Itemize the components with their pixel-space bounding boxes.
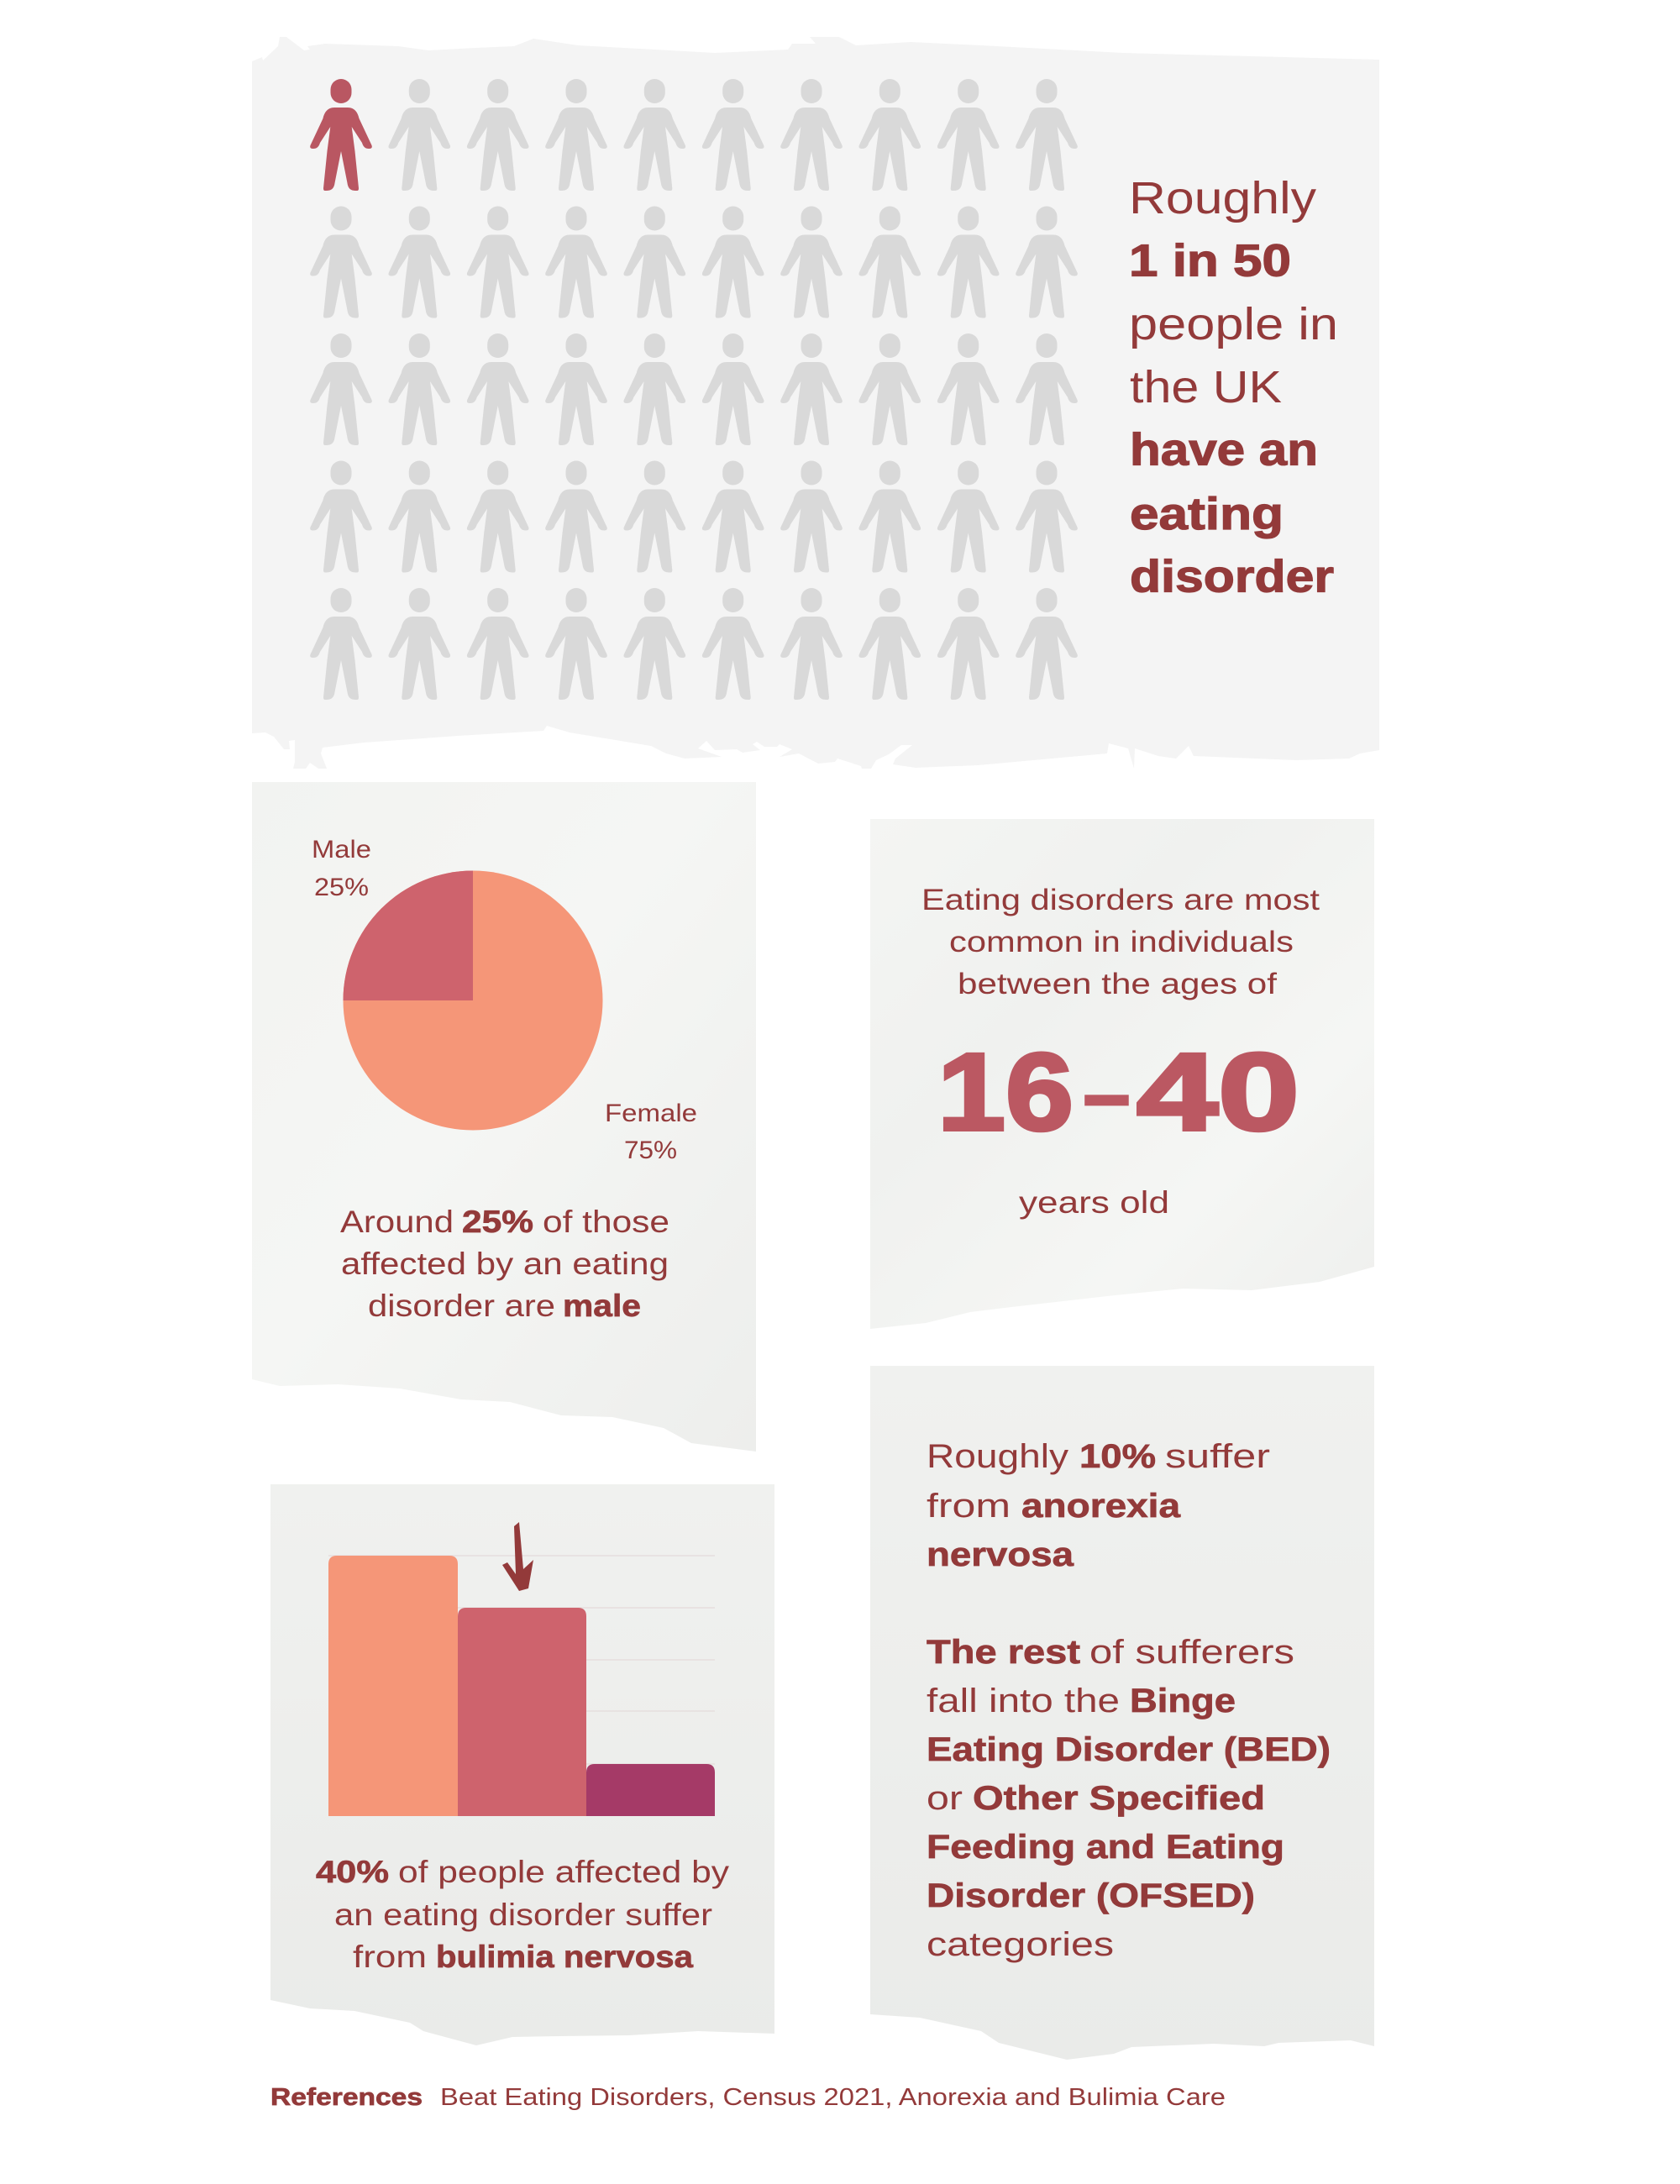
text: anorexia statement: suffer bbox=[1165, 1438, 1270, 1475]
text: 1 in 50 statement: disorder bbox=[1130, 551, 1334, 601]
arrow bbox=[502, 1522, 533, 1591]
text: other categories statement: The rest bbox=[927, 1634, 1080, 1671]
label: female 75%: 75% bbox=[624, 1137, 677, 1164]
text: 40 percent bulimia: bulimia nervosa bbox=[436, 1940, 693, 1974]
torn paper background bbox=[252, 782, 756, 1452]
text: 1 in 50 statement: eating bbox=[1130, 489, 1284, 539]
text: 25 percent are male: 25% bbox=[462, 1205, 533, 1239]
bar: first bbox=[328, 1556, 458, 1816]
label: male 25%: 25% bbox=[314, 874, 369, 901]
text: 40 percent bulimia: of people affected by bbox=[398, 1855, 730, 1889]
text: other categories statement: fall into the bbox=[927, 1683, 1120, 1719]
panel: other eating disorders bbox=[870, 1366, 1374, 2060]
text: 25 percent are male: Around bbox=[340, 1205, 454, 1239]
text: 1 in 50 statement: Roughly bbox=[1129, 173, 1316, 223]
big number: 16-40: 40 bbox=[1137, 1030, 1299, 1153]
text: other categories statement: or bbox=[927, 1780, 963, 1817]
text: 1 in 50 statement bbox=[1129, 173, 1338, 601]
panel: 1 in 50 people bbox=[252, 37, 1379, 769]
text: 40 percent bulimia bbox=[316, 1855, 730, 1974]
references: Beat Eating Disorders, Census 2021, Anorexia and Bulimia Care bbox=[440, 2084, 1226, 2111]
text: age intro: between the ages of bbox=[958, 968, 1277, 1000]
bar: bulimia 40 percent bbox=[458, 1608, 586, 1816]
big number: 16-40 bbox=[937, 1030, 1299, 1153]
text: 25 percent are male bbox=[340, 1205, 669, 1323]
text: anorexia statement: Roughly bbox=[927, 1438, 1068, 1475]
pictogram: highlighted person bbox=[310, 79, 372, 191]
big number: 16-40: 16 bbox=[937, 1030, 1074, 1153]
text: other categories statement: Binge bbox=[1130, 1683, 1236, 1719]
text: other categories statement: Feeding and Eating bbox=[927, 1829, 1284, 1866]
text: 1 in 50 statement: people in bbox=[1129, 299, 1338, 349]
text: other categories statement bbox=[927, 1634, 1331, 1963]
text: anorexia statement: anorexia bbox=[1021, 1488, 1181, 1525]
text: 40 percent bulimia: an eating disorder suffer bbox=[334, 1898, 712, 1932]
text: anorexia statement: from bbox=[927, 1488, 1011, 1525]
text: anorexia statement: nervosa bbox=[927, 1536, 1074, 1573]
panel: age range bbox=[870, 819, 1374, 1329]
pie chart bbox=[343, 870, 603, 1131]
torn paper background bbox=[252, 37, 1379, 769]
text: other categories statement: of sufferers bbox=[1089, 1634, 1294, 1671]
torn paper background bbox=[870, 819, 1374, 1329]
text: age intro: common in individuals bbox=[949, 926, 1294, 958]
text: anorexia statement bbox=[927, 1438, 1270, 1573]
text: 25 percent are male: male bbox=[563, 1289, 641, 1323]
text: other categories statement: categories bbox=[927, 1926, 1114, 1963]
text: other categories statement: Eating Disorder (BED) bbox=[927, 1731, 1331, 1768]
panel: bulimia bar chart bbox=[270, 1484, 774, 2045]
bar chart bbox=[328, 1556, 715, 1816]
text: years old: years old bbox=[1019, 1185, 1169, 1220]
torn paper background bbox=[870, 1366, 1374, 2060]
label: female 75% bbox=[605, 1100, 697, 1164]
text: 40 percent bulimia: from bbox=[353, 1940, 427, 1974]
label: female 75%: Female bbox=[605, 1100, 697, 1127]
text: 1 in 50 statement: 1 in 50 bbox=[1129, 235, 1291, 286]
text: 25 percent are male: disorder are bbox=[368, 1289, 555, 1323]
panel: gender pie chart bbox=[252, 782, 756, 1452]
big number: 16-40: – bbox=[1082, 1030, 1131, 1153]
label: male 25% bbox=[312, 836, 371, 901]
label: male 25%: Male bbox=[312, 836, 371, 864]
torn paper background bbox=[270, 1484, 774, 2045]
text: other categories statement: Other Specified bbox=[973, 1780, 1265, 1817]
text: 25 percent are male: of those bbox=[543, 1205, 669, 1239]
text: 1 in 50 statement: the UK bbox=[1130, 362, 1282, 412]
text: 25 percent are male: affected by an eating bbox=[341, 1247, 669, 1281]
text: age intro: Eating disorders are most bbox=[921, 884, 1320, 916]
pictogram: remaining 49 people bbox=[310, 79, 1078, 700]
text: anorexia statement: 10% bbox=[1079, 1438, 1156, 1475]
text: 1 in 50 statement: have an bbox=[1130, 425, 1318, 475]
bar: anorexia bbox=[586, 1764, 715, 1816]
text: age intro bbox=[921, 884, 1320, 1000]
text: 40 percent bulimia: 40% bbox=[316, 1855, 389, 1889]
references: References bbox=[270, 2084, 423, 2111]
text: other categories statement: Disorder (OFSED) bbox=[927, 1877, 1255, 1914]
